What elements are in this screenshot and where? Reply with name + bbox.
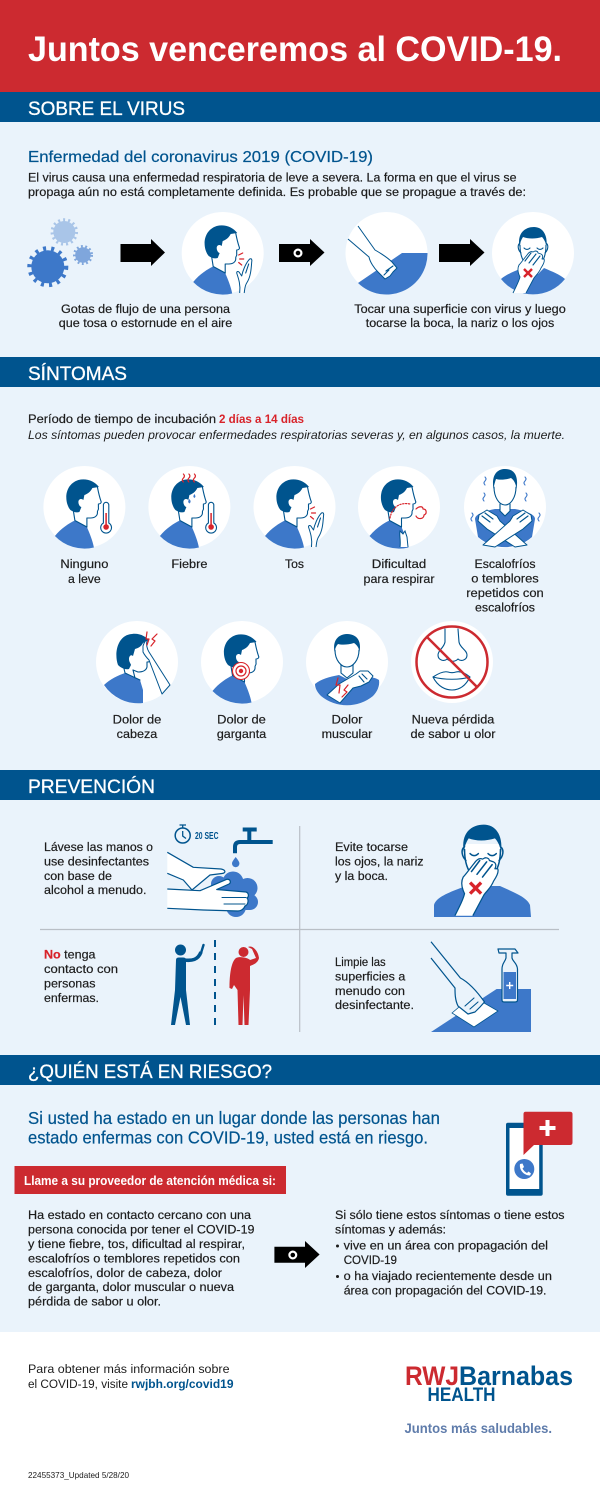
title banner: Juntos venceremos al COVID-19. — [28, 30, 562, 69]
label: a leve — [68, 572, 101, 586]
panel: sobre el virus — [28, 149, 574, 330]
section header: prevencion: PREVENCIÓN — [28, 775, 155, 798]
arrow — [439, 239, 484, 266]
incubation text — [28, 412, 565, 442]
section header: quien esta en riesgo — [0, 1055, 600, 1085]
incubation text: Período de tiempo de incubación — [28, 412, 216, 426]
caption: droplets: Gotas de flujo de una persona — [61, 302, 230, 316]
label: Fiebre — [171, 557, 208, 571]
text: contact conditions: escalofríos o temblores repetidos con — [28, 1252, 240, 1266]
intro text: El virus causa una enfermedad respiratoria de leve a severa. La forma en que el virus se — [28, 170, 517, 184]
logo: RWJBarnabas Health: Barnabas — [459, 1361, 573, 1391]
section header: prevencion — [0, 770, 600, 800]
document id: 22455373_Updated 5/28/20 — [28, 1470, 129, 1480]
logo: RWJBarnabas Health: HEALTH — [428, 1385, 496, 1406]
label: de sabor u olor — [410, 727, 496, 741]
text: additional conditions: COVID-19 — [344, 1253, 397, 1267]
logo: RWJBarnabas Health — [404, 1361, 573, 1436]
text: no contact — [44, 948, 118, 1005]
icon: hand washing — [167, 825, 273, 917]
label: Escalofríos — [474, 557, 536, 571]
label — [466, 557, 544, 614]
icon: dolor de garganta — [201, 621, 283, 704]
icon: fiebre — [148, 466, 230, 549]
risk heading — [28, 1108, 440, 1148]
label: Nueva pérdida — [412, 712, 494, 726]
text: contact conditions: de garganta, dolor muscular o nueva — [28, 1280, 234, 1294]
title banner — [0, 0, 600, 92]
incubation text: 2 días a 14 días — [219, 412, 304, 426]
arrow with o — [279, 239, 324, 266]
text: clean surfaces: menudo con — [335, 984, 405, 998]
tagline: Juntos más saludables. — [404, 1420, 552, 1436]
text: avoid touching: los ojos, la nariz — [335, 854, 424, 868]
section header: sintomas — [0, 357, 600, 387]
text: additional conditions: área con propagación del COVID-19. — [344, 1284, 546, 1298]
footer: more information: Para obtener más información sobre — [28, 1362, 230, 1376]
icon: hand washing: 20 SEC — [195, 831, 218, 842]
text: contact conditions — [28, 1208, 255, 1308]
label: para respirar — [364, 572, 434, 586]
subheading: Enfermedad del coronavirus 2019 (COVID-19) — [28, 149, 373, 166]
label: repetidos con — [466, 586, 544, 600]
icon: perdida de sabor u olor — [411, 621, 493, 703]
section header: sobre el virus: SOBRE EL VIRUS — [28, 98, 185, 120]
caption: surface — [354, 302, 566, 330]
text: wash hands: use desinfectantes — [44, 854, 149, 868]
label — [410, 712, 496, 741]
risk heading: Si usted ha estado en un lugar donde las personas han — [28, 1108, 440, 1128]
label: cabeza — [117, 727, 157, 741]
footer: more information: el COVID-19, visite — [28, 1377, 128, 1391]
icon: wiping surface with spray — [431, 942, 531, 1032]
icon: hand touching surface — [346, 212, 428, 295]
label — [322, 712, 372, 741]
icon: dificultad para respirar — [358, 466, 440, 549]
text: additional conditions — [335, 1208, 564, 1298]
footer: more information: rwjbh.org/covid19 — [131, 1377, 234, 1391]
text: clean surfaces: desinfectante. — [335, 998, 414, 1012]
section header: sobre el virus — [0, 92, 600, 122]
text: avoid touching: y la boca. — [335, 869, 388, 883]
text: clean surfaces — [335, 955, 414, 1012]
incubation text: Los síntomas pueden provocar enfermedades respiratorias severas y, en algunos casos, la muerte. — [28, 428, 565, 442]
text: additional conditions: síntomas y además: — [335, 1222, 446, 1236]
text: wash hands — [44, 840, 153, 897]
text: wash hands: con base de — [44, 869, 112, 883]
panel: quien esta en riesgo — [14, 1108, 572, 1308]
label: Dolor — [332, 712, 362, 726]
text: no contact: personas — [44, 976, 96, 990]
section header: quien esta en riesgo: ¿QUIÉN ESTÁ EN RIESGO? — [28, 1060, 272, 1083]
icon: person coughing — [182, 212, 264, 295]
text: avoid touching: Evite tocarse — [335, 840, 408, 854]
label: Tos — [285, 557, 304, 571]
text: additional conditions: vive en un área con propagación del — [344, 1238, 548, 1252]
intro text — [28, 170, 526, 199]
label: Dolor de — [113, 712, 161, 726]
text: no contact: enfermas. — [44, 991, 99, 1005]
icon: dolor muscular — [306, 621, 388, 705]
icon: ninguno a leve — [43, 466, 125, 549]
caption: surface: Tocar una superficie con virus y luego — [354, 302, 566, 316]
text: contact conditions: escalofríos, dolor de cabeza, dolor — [28, 1266, 222, 1280]
text: wash hands: Lávese las manos o — [44, 840, 153, 854]
label: Dolor de — [217, 712, 266, 726]
text: clean surfaces: Limpie las — [335, 955, 386, 969]
caption: droplets: que tosa o estornude en el aire — [59, 316, 232, 330]
logo: RWJBarnabas Health: RWJ — [405, 1361, 459, 1391]
label: escalofríos — [475, 600, 535, 614]
text: contact conditions: Ha estado en contacto cercano con una — [28, 1208, 251, 1222]
text: wash hands: alcohol a menudo. — [44, 883, 146, 897]
label: Dificultad — [372, 557, 426, 571]
text: contact conditions: persona conocida por tener el COVID-19 — [28, 1222, 255, 1236]
label: garganta — [217, 727, 266, 741]
footer: more information — [28, 1362, 234, 1391]
icon: dolor de cabeza — [96, 621, 178, 703]
text: no contact: No tenga — [44, 948, 96, 962]
icon: person touching face — [434, 825, 531, 917]
text: additional conditions: o ha viajado recientemente desde un — [344, 1269, 552, 1283]
label: muscular — [322, 727, 372, 741]
caption: droplets — [59, 302, 232, 330]
panel: sintomas — [28, 412, 565, 741]
label — [364, 557, 434, 586]
arrow with o — [274, 1241, 320, 1268]
label — [60, 557, 108, 586]
label — [113, 712, 161, 741]
intro text: propaga aún no está completamente definida. Es probable que se propague a través de: — [28, 185, 526, 199]
icon: keep distance people — [171, 940, 259, 1029]
label — [217, 712, 266, 741]
icon: person touching face — [492, 212, 574, 294]
label: o temblores — [471, 572, 539, 586]
icon: escalofrios — [464, 466, 546, 548]
callout: call your provider — [14, 1166, 286, 1194]
text: clean surfaces: superficies a — [335, 970, 405, 984]
text: additional conditions: Si sólo tiene estos síntomas o tiene estos — [335, 1208, 564, 1222]
label: Ninguno — [60, 557, 108, 571]
text: contact conditions: pérdida de sabor u olor. — [28, 1294, 161, 1308]
section header: sintomas: SÍNTOMAS — [28, 362, 127, 385]
risk heading: estado enfermas con COVID-19, usted está en riesgo. — [28, 1128, 428, 1148]
text: contact conditions: y tiene fiebre, tos, dificultad al respirar, — [28, 1237, 245, 1251]
arrow — [120, 239, 165, 266]
panel: prevencion — [40, 825, 559, 1032]
icon: phone with medical message — [506, 1112, 572, 1196]
caption: surface: tocarse la boca, la nariz o los ojos — [366, 316, 554, 330]
text: avoid touching — [335, 840, 424, 883]
icon: virus particles — [30, 220, 92, 285]
text: no contact: contacto con — [44, 962, 118, 976]
callout: call your provider: Llame a su proveedor de atención médica si: — [24, 1174, 276, 1188]
icon: tos — [254, 466, 336, 549]
